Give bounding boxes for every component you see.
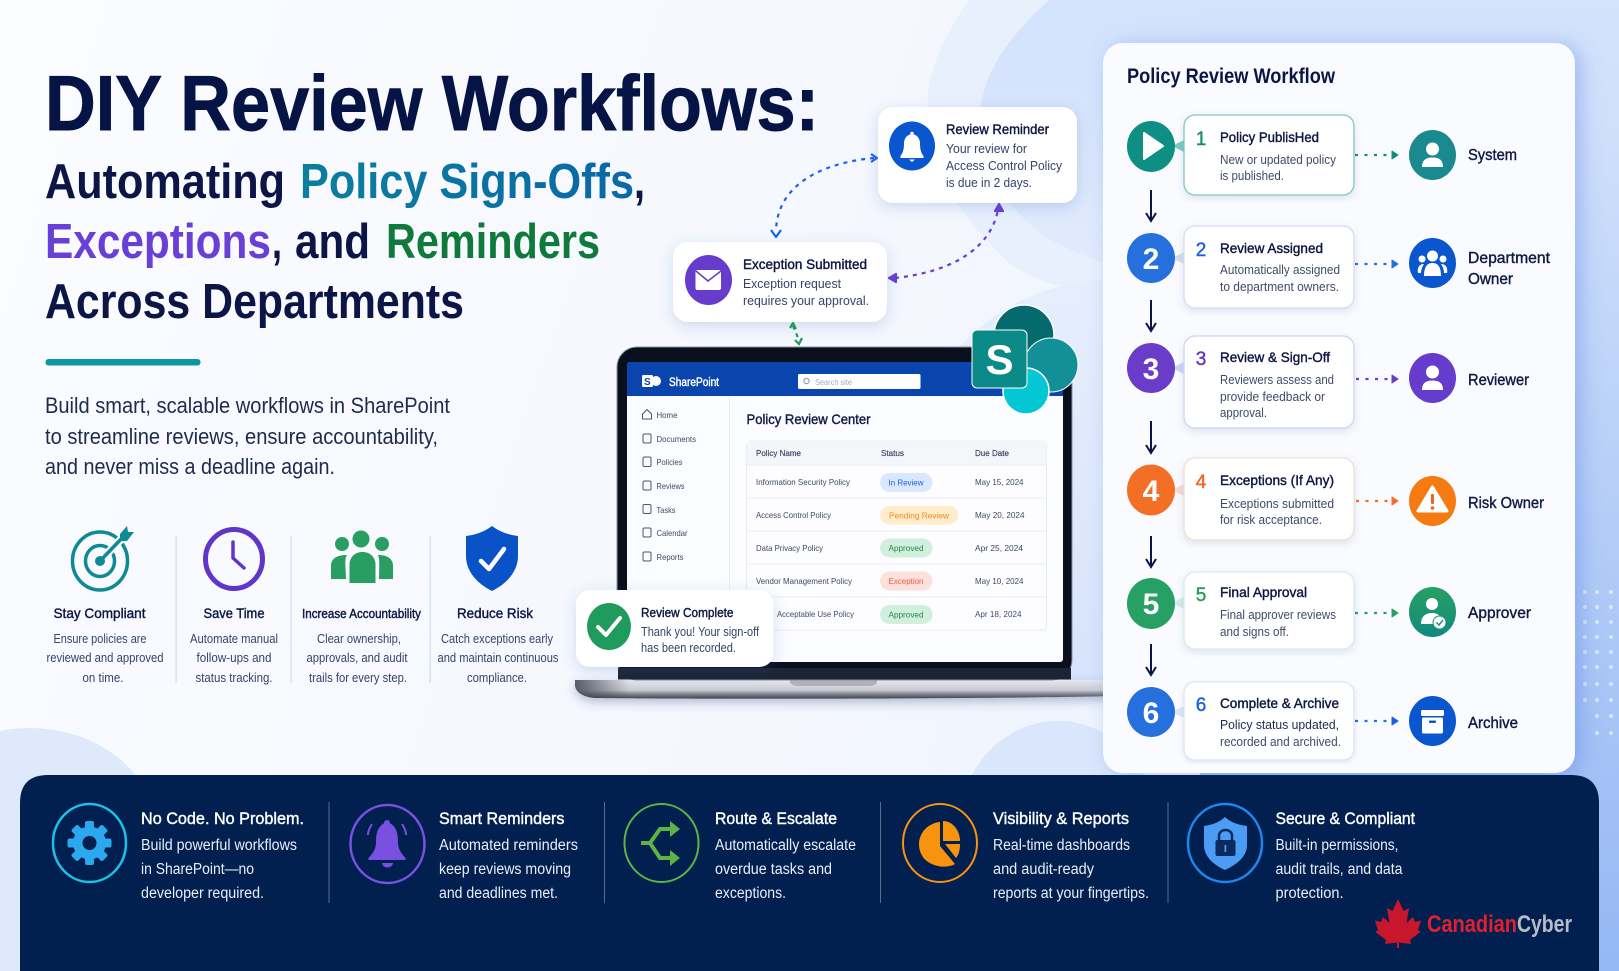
- icon: envelope: [685, 255, 732, 305]
- status pills: Approved: [888, 543, 924, 553]
- icon: clock: [206, 530, 262, 588]
- icon: maple leaf: [1375, 899, 1421, 948]
- step 5: Final approver reviews: [1220, 608, 1336, 622]
- sidebar navigation: Documents: [656, 434, 696, 444]
- role: approver: Approver: [1468, 605, 1532, 622]
- laptop: [575, 347, 1110, 699]
- benefit: increase accountability: trails for every step.: [309, 671, 407, 685]
- policy table: May 15, 2024: [975, 477, 1024, 487]
- icon: people: [331, 530, 393, 583]
- footer item: route and escalate: overdue tasks and: [715, 861, 832, 878]
- footer band: [20, 775, 1599, 971]
- sharepoint header bar: S: [644, 377, 651, 388]
- footer item: no code: [53, 804, 304, 902]
- footer item: route and escalate: exceptions.: [715, 885, 786, 902]
- step 5: 5: [1143, 588, 1159, 621]
- arrow: step 5 to approver: [1355, 609, 1398, 617]
- card: exception submitted: requires your approval.: [743, 294, 869, 308]
- sharepoint logo: S: [985, 336, 1014, 383]
- icon: bell: [350, 805, 424, 883]
- step 4: Exceptions submitted: [1220, 497, 1334, 511]
- step 4: 4: [1196, 472, 1207, 493]
- policy table: Apr 25, 2024: [975, 543, 1023, 553]
- step 6: Complete & Archive: [1220, 695, 1339, 711]
- card: review complete: has been recorded.: [641, 641, 736, 655]
- step 3: Reviewers assess and: [1220, 373, 1334, 387]
- canadiancyber logo: [1375, 899, 1572, 948]
- footer item: secure and compliant: Built-in permissions,: [1276, 837, 1398, 854]
- footer item: no code: developer required.: [141, 885, 264, 902]
- intro paragraph: [45, 393, 450, 479]
- arrow: step 2 to 3: [1146, 300, 1156, 331]
- step 5: and signs off.: [1220, 625, 1289, 639]
- benefit: stay compliant: reviewed and approved: [46, 651, 164, 665]
- step 3: [1127, 336, 1354, 428]
- subtitle: Policy Sign-Offs: [300, 155, 634, 209]
- arrow: reminder to exception: [771, 154, 877, 237]
- sidebar navigation: [642, 396, 730, 662]
- step 6: 6: [1196, 695, 1206, 716]
- card: exception submitted: Exception Submitted: [743, 257, 867, 272]
- footer item: no code: No Code. No Problem.: [141, 809, 304, 828]
- policy table: Information Security Policy: [756, 477, 851, 487]
- policy table: May 20, 2024: [975, 510, 1025, 520]
- icon: bell: [889, 122, 935, 170]
- benefit: save time: Save Time: [204, 605, 265, 621]
- role: archive: [1409, 696, 1518, 746]
- icon: target: [72, 526, 134, 590]
- arrow: step 3 to 4: [1146, 421, 1156, 453]
- footer item: route and escalate: Automatically escalate: [715, 837, 856, 854]
- footer item: secure and compliant: protection.: [1276, 885, 1344, 902]
- canadiancyber logo: Cyber: [1517, 911, 1572, 938]
- benefit: increase accountability: Increase Accountability: [302, 606, 421, 621]
- sidebar navigation: Tasks: [656, 505, 676, 515]
- arrow: step 4 to 5: [1146, 536, 1156, 567]
- benefit: increase accountability: [302, 530, 421, 685]
- benefit: reduce risk: Catch exceptions early: [441, 632, 554, 646]
- step 4: [1127, 458, 1354, 540]
- icon: shield check: [466, 526, 518, 591]
- role: system: System: [1468, 147, 1517, 164]
- footer item: no code: in SharePoint—no: [141, 861, 254, 878]
- arrow: step 2 to department owner: [1355, 260, 1398, 268]
- footer item: no code: Build powerful workflows: [141, 837, 297, 854]
- subtitle: Automating: [45, 155, 285, 209]
- step 5: [1127, 572, 1354, 649]
- role: risk owner: Risk Owner: [1468, 495, 1545, 512]
- card: exception submitted: Exception request: [743, 277, 842, 291]
- role: department owner: [1409, 238, 1551, 288]
- arrow: exception to reminder: [889, 204, 1003, 282]
- status pills: Approved: [888, 610, 924, 620]
- arrow: step 4 to risk owner: [1356, 497, 1398, 505]
- subtitle: Across Departments: [45, 275, 464, 329]
- policy table: Due Date: [975, 448, 1009, 458]
- intro paragraph: to streamline reviews, ensure accountability,: [45, 424, 438, 449]
- laptop screen: Policy Review Center: [746, 411, 871, 427]
- card: review reminder: Review Reminder: [946, 122, 1049, 137]
- subtitle: Reminders: [386, 215, 600, 269]
- footer item: visibility and reports: [903, 804, 1149, 902]
- step 4: for risk acceptance.: [1220, 513, 1322, 527]
- step 3: 3: [1143, 353, 1159, 386]
- role: risk owner: [1409, 476, 1545, 526]
- step 6: 6: [1143, 697, 1159, 730]
- sharepoint header bar: SharePoint: [669, 377, 720, 389]
- step 3: Review & Sign-Off: [1220, 349, 1330, 365]
- step 1: New or updated policy: [1220, 153, 1337, 167]
- card: review complete: Thank you! Your sign-off: [641, 625, 759, 639]
- laptop base: [575, 680, 1110, 699]
- benefit: stay compliant: Ensure policies are: [54, 632, 147, 646]
- card: review reminder: Access Control Policy: [946, 159, 1063, 173]
- sidebar navigation: Reviews: [656, 481, 684, 491]
- footer item: route and escalate: Route & Escalate: [715, 809, 837, 828]
- benefit: stay compliant: Stay Compliant: [54, 605, 146, 621]
- card: review reminder: Your review for: [946, 142, 1027, 156]
- benefit: reduce risk: and maintain continuous: [438, 651, 558, 665]
- policy table: Status: [881, 448, 904, 458]
- icon: shield lock: [1188, 804, 1262, 882]
- role: archive: Archive: [1468, 715, 1518, 732]
- policy table: Acceptable Use Policy: [777, 609, 855, 619]
- step 1: 1: [1196, 129, 1206, 150]
- footer item: visibility and reports: Visibility & Reports: [993, 809, 1129, 828]
- footer item: smart reminders: Automated reminders: [439, 837, 578, 854]
- benefit: stay compliant: [46, 526, 164, 685]
- icon: pie chart: [903, 804, 977, 882]
- laptop screen: [627, 362, 1063, 662]
- panel heading: Policy Review Workflow: [1127, 65, 1336, 88]
- benefit: increase accountability: approvals, and audit: [306, 651, 408, 665]
- title: DIY Review Workflows:: [45, 59, 819, 147]
- policy table: Data Privacy Policy: [756, 543, 824, 553]
- benefit: save time: status tracking.: [196, 671, 272, 685]
- subtitle: ,: [272, 215, 282, 269]
- role: approver: [1409, 587, 1532, 637]
- subtitle: ,: [634, 155, 645, 209]
- step 4: 4: [1143, 475, 1160, 508]
- step 1: is published.: [1220, 169, 1284, 183]
- policy table: Access Control Policy: [756, 510, 832, 520]
- sidebar navigation: Home: [656, 410, 678, 420]
- footer item: route and escalate: [624, 804, 856, 902]
- sharepoint header bar: [627, 362, 1063, 396]
- step 4: Exceptions (If Any): [1220, 472, 1334, 488]
- benefit: save time: [190, 530, 278, 685]
- sidebar navigation: Reports: [656, 552, 684, 562]
- arrow: step 6 to archive: [1355, 717, 1398, 725]
- status pills: In Review: [888, 478, 924, 488]
- footer item: smart reminders: keep reviews moving: [439, 861, 571, 878]
- card: review complete: Review Complete: [641, 605, 734, 620]
- step 1: Policy PublisHed: [1220, 129, 1319, 145]
- step 3: 3: [1196, 349, 1206, 370]
- benefit: stay compliant: on time.: [82, 671, 124, 685]
- panel: policy review workflow: [1103, 43, 1575, 773]
- icon: branch arrows: [624, 804, 698, 882]
- policy table: [746, 441, 1046, 630]
- arrow: step 1 to system: [1355, 151, 1398, 159]
- footer item: smart reminders: [350, 805, 578, 902]
- arrow: exception to laptop: [790, 323, 802, 344]
- role: department owner: Department: [1468, 250, 1551, 267]
- subtitle: [45, 155, 645, 329]
- card: review reminder: [878, 107, 1077, 203]
- footer item: smart reminders: Smart Reminders: [439, 809, 564, 828]
- footer item: visibility and reports: and audit-ready: [993, 861, 1094, 878]
- step 2: 2: [1143, 243, 1159, 276]
- card: review reminder: is due in 2 days.: [946, 176, 1032, 190]
- sharepoint logo: [972, 305, 1078, 414]
- step 5: Final Approval: [1220, 584, 1307, 600]
- step 2: Review Assigned: [1220, 240, 1323, 256]
- footer item: secure and compliant: audit trails, and data: [1276, 861, 1403, 878]
- benefit: reduce risk: compliance.: [467, 671, 527, 685]
- step 6: [1127, 682, 1354, 760]
- arrow: step 1 to 2: [1146, 190, 1156, 221]
- role: system: [1409, 130, 1517, 180]
- policy table: Vendor Management Policy: [756, 576, 853, 586]
- step 2: Automatically assigned: [1220, 263, 1340, 277]
- footer item: smart reminders: and deadlines met.: [439, 885, 558, 902]
- step 5: 5: [1196, 585, 1206, 606]
- accent bar: [46, 359, 200, 366]
- policy table: May 10, 2024: [975, 576, 1024, 586]
- card: review complete: [576, 590, 774, 667]
- footer item: visibility and reports: reports at your fingertips.: [993, 885, 1149, 902]
- step 3: approval.: [1220, 406, 1267, 420]
- footer item: visibility and reports: Real-time dashboards: [993, 837, 1130, 854]
- benefit: save time: Automate manual: [190, 632, 278, 646]
- benefit: reduce risk: [438, 526, 558, 685]
- step 2: 2: [1196, 240, 1206, 261]
- arrow: step 5 to 6: [1146, 644, 1156, 675]
- subtitle: and: [295, 215, 370, 269]
- footer item: secure and compliant: [1188, 804, 1415, 902]
- sidebar navigation: Policies: [656, 457, 682, 467]
- icon: check circle: [587, 603, 631, 650]
- step 6: recorded and archived.: [1220, 735, 1341, 749]
- intro paragraph: Build smart, scalable workflows in SharePoint: [45, 393, 450, 418]
- icon: gear: [53, 804, 126, 882]
- status pills: Exception: [888, 576, 924, 586]
- canadiancyber logo: Canadian: [1427, 911, 1517, 938]
- benefits row: [46, 526, 558, 685]
- policy table: Apr 18, 2024: [975, 609, 1022, 619]
- step 1: [1127, 115, 1354, 195]
- card: exception submitted: [673, 242, 887, 322]
- role: reviewer: Reviewer: [1468, 372, 1530, 389]
- benefit: save time: follow-ups and: [196, 651, 272, 665]
- benefit: reduce risk: Reduce Risk: [457, 605, 534, 621]
- footer item: secure and compliant: Secure & Compliant: [1276, 809, 1415, 828]
- intro paragraph: and never miss a deadline again.: [45, 454, 335, 479]
- sidebar navigation: Calendar: [656, 528, 688, 538]
- step 2: [1127, 226, 1354, 308]
- role: reviewer: [1409, 353, 1530, 403]
- step 6: Policy status updated,: [1220, 718, 1339, 732]
- status pills: Pending Review: [889, 510, 950, 520]
- step 2: to department owners.: [1220, 280, 1339, 294]
- sharepoint header bar: Search site: [815, 378, 852, 387]
- subtitle: Exceptions: [45, 215, 271, 269]
- status pills: [880, 473, 958, 624]
- benefit: increase accountability: Clear ownership,: [317, 632, 401, 646]
- step 3: provide feedback or: [1220, 390, 1325, 404]
- arrow: step 3 to reviewer: [1356, 375, 1398, 383]
- policy table: Policy Name: [756, 448, 801, 458]
- role: department owner: Owner: [1468, 271, 1514, 288]
